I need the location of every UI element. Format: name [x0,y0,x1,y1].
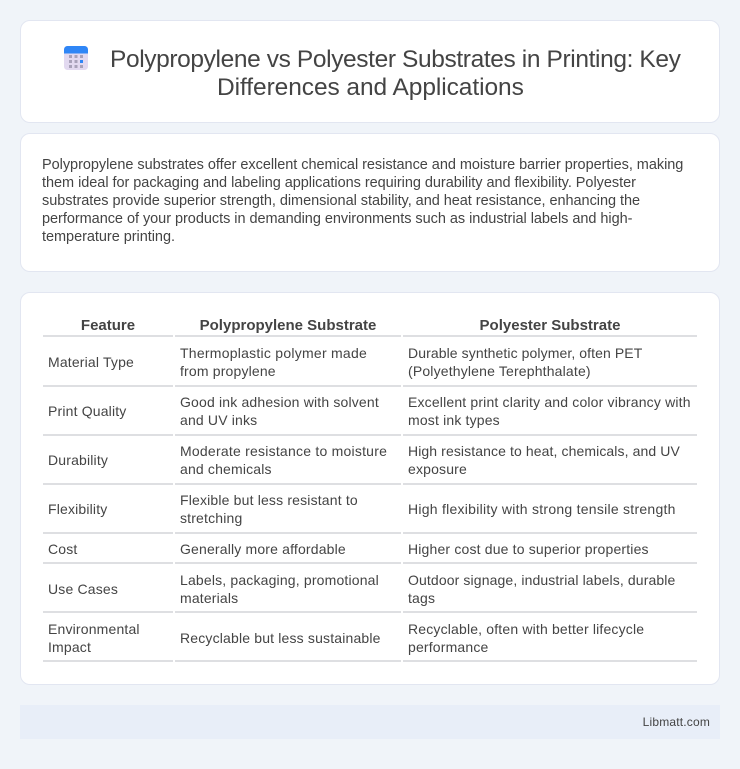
header card [20,20,720,123]
table: Generally more affordable [180,541,346,557]
table: and chemicals [180,461,272,477]
intro text: temperature printing. [42,229,175,245]
intro text: them ideal for packaging and labeling applications requiring durability and flexibility. Polyester [42,175,636,191]
table: and UV inks [180,412,257,428]
title: Polypropylene vs Polyester Substrates in Printing: Key [110,46,680,73]
table: performance [408,639,488,655]
title [110,46,681,101]
row: print quality: Print Quality [48,403,126,419]
row: material type: Material Type [48,354,134,370]
icon: calendar [64,46,88,70]
table: Good ink adhesion with solvent [180,394,379,410]
intro text: Polypropylene substrates offer excellent chemical resistance and moisture barrier properties, making [42,157,683,173]
table: High flexibility with strong tensile strength [408,501,676,517]
title: Differences and Applications [217,74,524,101]
table: Outdoor signage, industrial labels, durable [408,572,675,588]
row: durability: Durability [48,452,108,468]
row: use cases: Use Cases [48,581,118,597]
footer [20,705,720,739]
table: tags [408,590,435,606]
table: Thermoplastic polymer made [180,345,367,361]
table: materials [180,590,238,606]
table: most ink types [408,412,500,428]
table: stretching [180,510,242,526]
row: environmental impact [48,621,140,655]
table: from propylene [180,363,276,379]
table: Durable synthetic polymer, often PET [408,345,642,361]
intro text: substrates provide superior strength, dimensional stability, and heat resistance, enhancing the [42,193,640,209]
row: environmental impact: Impact [48,639,91,655]
table: High resistance to heat, chemicals, and UV [408,443,680,459]
table: Moderate resistance to moisture [180,443,387,459]
table: Flexible but less resistant to [180,492,358,508]
intro text: performance of your products in demanding environments such as industrial labels and high- [42,211,632,227]
table: Recyclable but less sustainable [180,630,381,646]
table: Polyester Substrate [480,317,620,334]
table: Higher cost due to superior properties [408,541,649,557]
row: environmental impact: Environmental [48,621,140,637]
table card [20,292,720,685]
table: exposure [408,461,467,477]
footer source text: Libmatt.com [643,715,710,729]
table header: Feature [81,317,135,334]
intro card [20,133,720,272]
table: (Polyethylene Terephthalate) [408,363,591,379]
table: Labels, packaging, promotional [180,572,379,588]
row: cost: Cost [48,541,77,557]
intro text [42,157,683,245]
table: Polypropylene Substrate [200,317,376,334]
row: flexibility: Flexibility [48,501,107,517]
table: Recyclable, often with better lifecycle [408,621,644,637]
table: Excellent print clarity and color vibrancy with [408,394,691,410]
